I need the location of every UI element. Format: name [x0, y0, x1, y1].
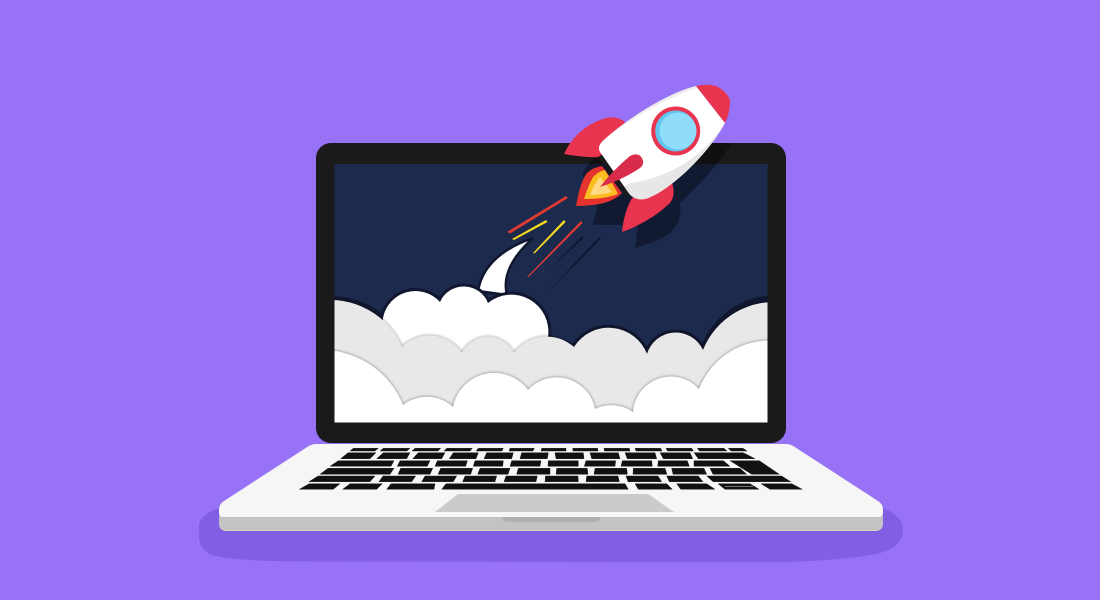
middle grey cloud — [334, 300, 768, 412]
keyboard row 5 — [309, 476, 791, 482]
keyboard enter key — [730, 461, 779, 474]
dark streak 1 — [550, 236, 584, 269]
flame middle — [584, 170, 618, 199]
keyboard — [299, 448, 802, 489]
rocket — [564, 85, 730, 232]
yellow streak 1 — [512, 220, 548, 240]
base underside line — [219, 518, 883, 531]
base side edge — [219, 516, 883, 530]
flame inner — [590, 177, 612, 195]
centre fin — [600, 154, 643, 187]
body — [599, 86, 725, 199]
nozzle — [598, 154, 628, 198]
keyboard row 6 — [299, 484, 802, 489]
lower fin — [622, 183, 674, 232]
left fin — [564, 117, 625, 157]
body shading — [624, 123, 725, 199]
base top deck — [219, 444, 883, 517]
dark streak 2 — [543, 237, 600, 297]
flame — [576, 166, 622, 206]
touchpad notch — [502, 517, 600, 522]
laptop ground shadow — [199, 508, 903, 562]
illustration: rocket launching from laptop — [199, 84, 903, 562]
back white cloud — [383, 286, 548, 353]
red streak 2 — [527, 221, 582, 277]
porthole ring — [651, 106, 700, 156]
back cloud dark outline — [334, 284, 768, 354]
key highlight line — [725, 486, 753, 487]
keyboard row 1 — [350, 448, 747, 451]
screen background — [334, 164, 768, 347]
keyboard row 3 — [330, 461, 730, 466]
porthole glass — [655, 110, 696, 152]
rocket shadow — [582, 143, 732, 248]
laptop bezel — [316, 143, 786, 443]
keyboard row 2 — [341, 453, 755, 459]
porthole highlight — [660, 112, 696, 150]
motion streaks — [507, 196, 600, 297]
front white cloud — [318, 340, 785, 425]
flame outer — [576, 166, 622, 206]
touchpad — [435, 494, 674, 512]
laptop screen — [334, 164, 768, 422]
body upper edge shading — [606, 86, 697, 138]
laptop base — [219, 444, 883, 531]
red streak 1 — [507, 196, 568, 234]
white launch trail — [478, 238, 533, 295]
keyboard row 4 — [320, 468, 747, 474]
nose cone — [696, 85, 730, 123]
yellow streak 2 — [533, 220, 566, 254]
